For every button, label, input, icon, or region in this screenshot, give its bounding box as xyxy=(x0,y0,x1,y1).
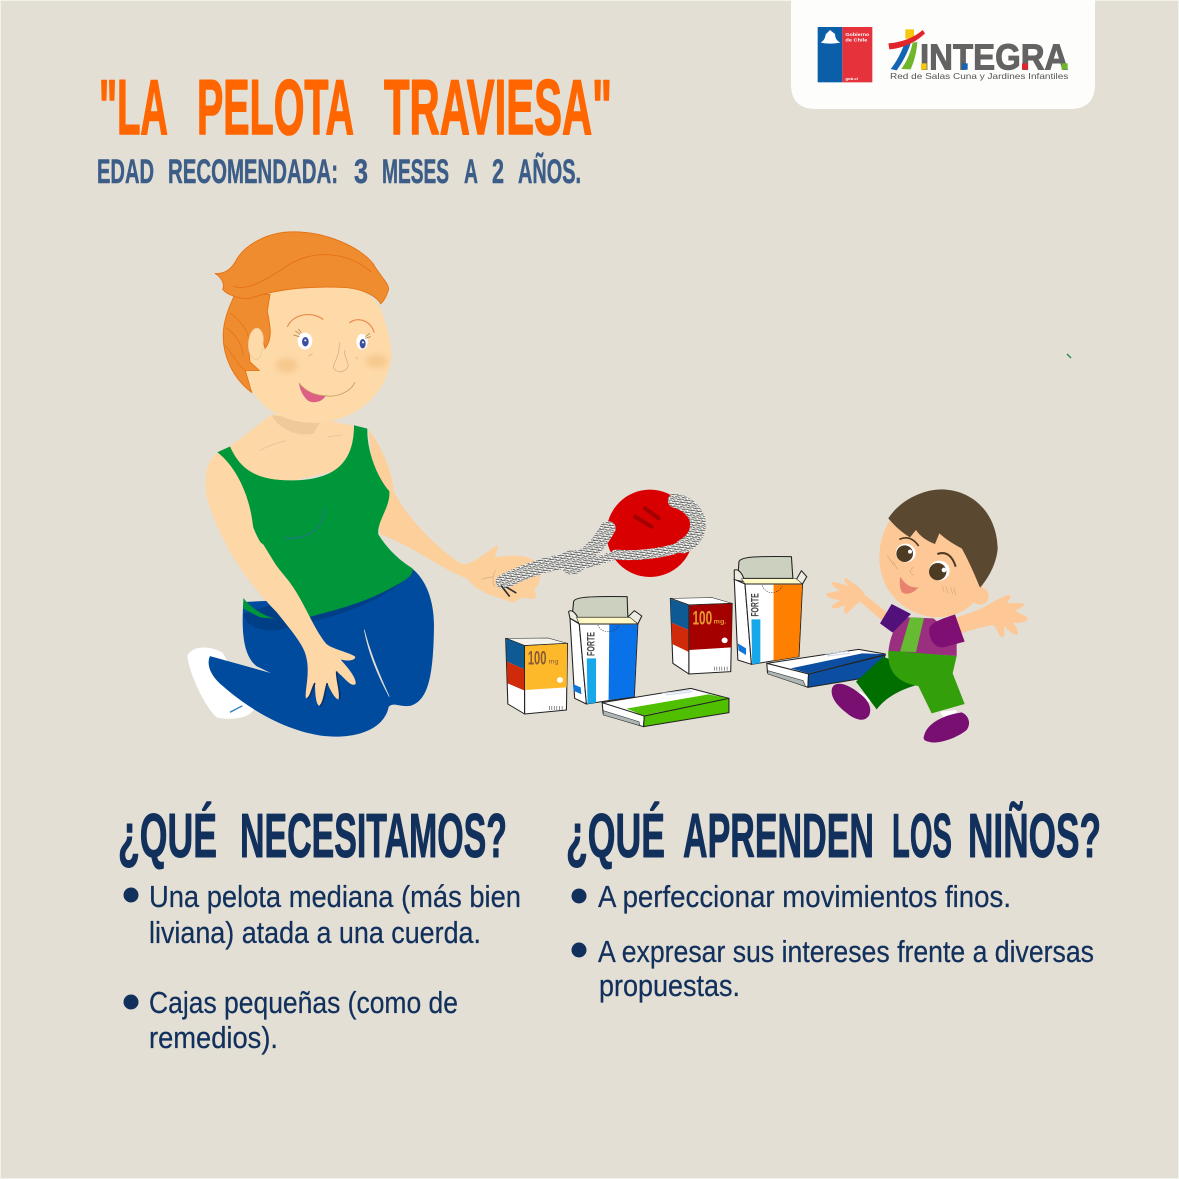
title: TRAVIESA" xyxy=(384,63,612,151)
box: orange forte: FORTE xyxy=(750,593,762,617)
subtitle: recommended age: RECOMENDADA: xyxy=(168,153,338,191)
right arm xyxy=(957,595,1027,637)
logo: Gobierno de Chile: gob.cl xyxy=(845,76,858,81)
title: "LA xyxy=(99,63,168,151)
collar lines xyxy=(259,435,341,451)
logo card xyxy=(791,0,1095,109)
trousers xyxy=(209,568,434,737)
list: materials: liviana) atada a una cuerda. xyxy=(149,915,481,950)
flat box: blue xyxy=(767,649,885,687)
shoes xyxy=(832,684,969,743)
trousers xyxy=(856,651,965,713)
illustration: kneeling woman xyxy=(187,232,540,737)
list: materials xyxy=(124,879,521,1055)
list: materials: remedios). xyxy=(149,1020,278,1055)
green tank top xyxy=(217,425,413,617)
red ball xyxy=(606,490,694,577)
list: materials: Cajas pequeñas (como de xyxy=(149,985,458,1020)
tiny mark xyxy=(1067,354,1071,358)
hair fringe xyxy=(215,232,389,304)
hand crease xyxy=(482,570,496,587)
upper body skin xyxy=(206,414,355,656)
heading: what children learn: ¿QUÉ xyxy=(566,802,665,871)
heading: what children learn: APRENDEN xyxy=(683,802,874,871)
right arm xyxy=(368,430,540,603)
subtitle: recommended age: 3 xyxy=(354,153,368,191)
left arm xyxy=(826,578,888,622)
heading: what we need xyxy=(118,802,507,871)
subtitle: recommended age: 2 xyxy=(492,153,504,191)
list: learning outcomes: propuestas. xyxy=(599,968,740,1003)
neck shadow xyxy=(272,415,322,434)
shirt xyxy=(880,604,965,656)
logo: Integra: Red de Salas Cuna y Jardines Infantiles xyxy=(890,71,1069,81)
box: red 100 mg: mg. xyxy=(714,619,727,626)
head xyxy=(245,276,391,423)
illustration: running child xyxy=(826,489,1027,743)
cheeks xyxy=(275,355,388,373)
sock xyxy=(187,648,254,719)
box: yellow 100 mg: mg xyxy=(549,659,559,665)
box: yellow 100 mg: 100 xyxy=(528,648,546,669)
ear and side hair xyxy=(223,294,270,392)
title: PELOTA xyxy=(197,63,354,151)
logo: Gobierno de Chile xyxy=(818,27,872,82)
box: orange forte xyxy=(734,557,807,664)
logo: Gobierno de Chile: Gobierno xyxy=(845,32,869,38)
title xyxy=(99,63,612,151)
hair xyxy=(888,489,998,588)
head xyxy=(879,489,998,617)
eyes and eyebrows xyxy=(287,315,374,349)
logo: Gobierno de Chile: de Chile xyxy=(845,37,868,43)
mouth xyxy=(299,382,355,402)
subtitle: recommended age: EDAD xyxy=(97,153,154,191)
left arm and hand xyxy=(206,453,356,706)
list: learning outcomes xyxy=(572,879,1094,1003)
box: blue forte: FORTE xyxy=(586,632,598,656)
list: learning outcomes: A perfeccionar movimientos finos. xyxy=(598,879,1011,914)
heading: what children learn xyxy=(566,802,1101,871)
eyes xyxy=(896,538,956,581)
flat box: green xyxy=(602,688,729,727)
logo: Integra xyxy=(888,29,1069,81)
ball with rope xyxy=(501,490,698,596)
box: blue forte xyxy=(569,597,642,704)
list: materials: Una pelota mediana (más bien xyxy=(149,879,521,914)
rope xyxy=(501,501,698,596)
mouth xyxy=(900,577,919,594)
subtitle: recommended age: AÑOS. xyxy=(518,153,581,191)
subtitle: recommended age: MESES xyxy=(382,153,449,191)
nose and blush xyxy=(887,556,956,595)
logo: Integra: INTEGRA xyxy=(920,36,1068,77)
nose xyxy=(308,342,357,372)
medicine boxes xyxy=(506,557,885,727)
subtitle: recommended age xyxy=(97,153,581,191)
heading: what we need: ¿QUÉ xyxy=(118,802,217,871)
box: red 100 mg xyxy=(670,598,732,674)
heading: what we need: NECESITAMOS? xyxy=(240,802,507,871)
box: yellow 100 mg xyxy=(506,638,567,714)
subtitle: recommended age: A xyxy=(464,153,478,191)
box: red 100 mg: 100 xyxy=(692,608,712,629)
heading: what children learn: LOS xyxy=(892,802,952,871)
list: learning outcomes: A expresar sus intereses frente a diversas xyxy=(598,934,1094,969)
